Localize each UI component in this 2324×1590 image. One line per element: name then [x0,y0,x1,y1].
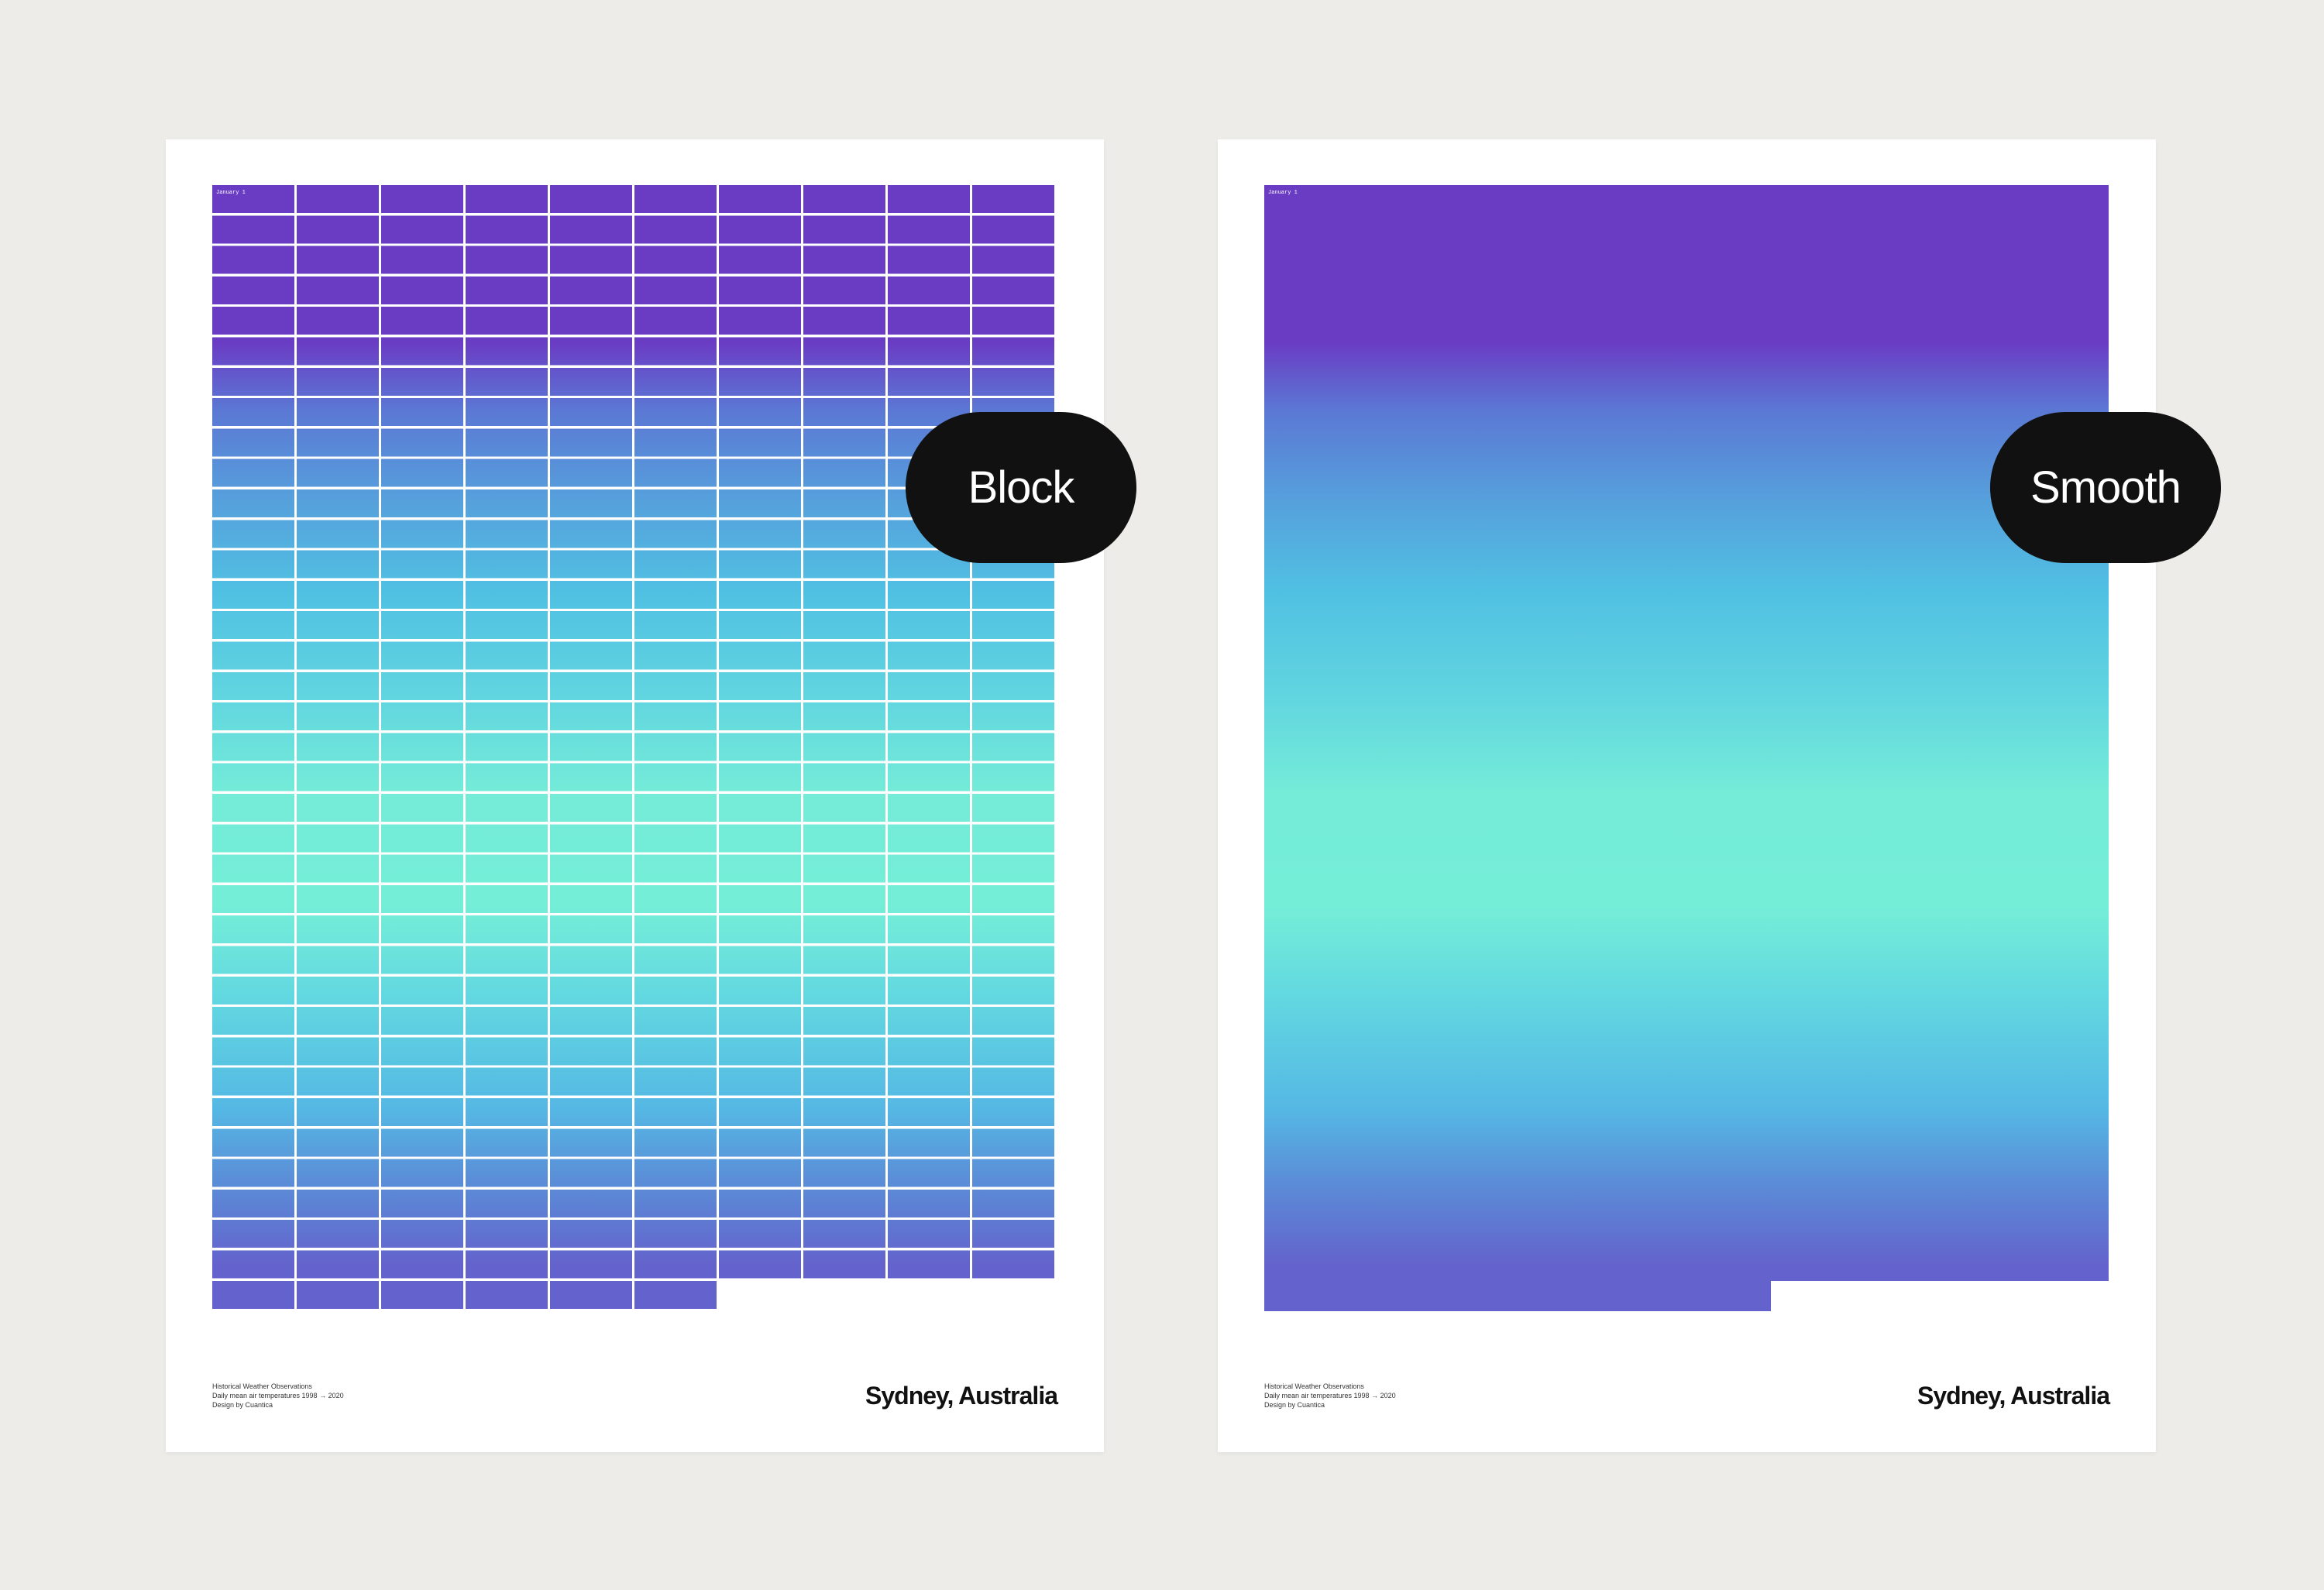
footer text [1264,1382,1396,1409]
footer text: Daily mean air temperatures 1998 → 2020 [1264,1392,1396,1399]
footer text: Historical Weather Observations [212,1382,312,1390]
label: Smooth pill: Smooth [2030,462,2181,513]
footer title: Sydney, Australia [1917,1382,2109,1410]
label: Smooth pill [1990,412,2221,563]
label: Block pill [906,412,1136,563]
panel: smooth poster [1218,139,2156,1452]
footer text: Historical Weather Observations [1264,1382,1364,1390]
chart: smooth calendar grid: January 1 [1268,190,1298,196]
footer title: Sydney, Australia [865,1382,1057,1410]
footer text: Daily mean air temperatures 1998 → 2020 [212,1392,344,1399]
label: Block pill: Block [968,462,1074,513]
chart: block calendar grid: January 1 [216,190,246,196]
footer text [212,1382,344,1409]
footer text: Design by Cuantica [1264,1401,1325,1409]
footer text: Design by Cuantica [212,1401,273,1409]
chart: smooth calendar grid [1264,185,2109,1311]
chart: block calendar grid [212,185,1057,1311]
panel: block poster [166,139,1104,1452]
